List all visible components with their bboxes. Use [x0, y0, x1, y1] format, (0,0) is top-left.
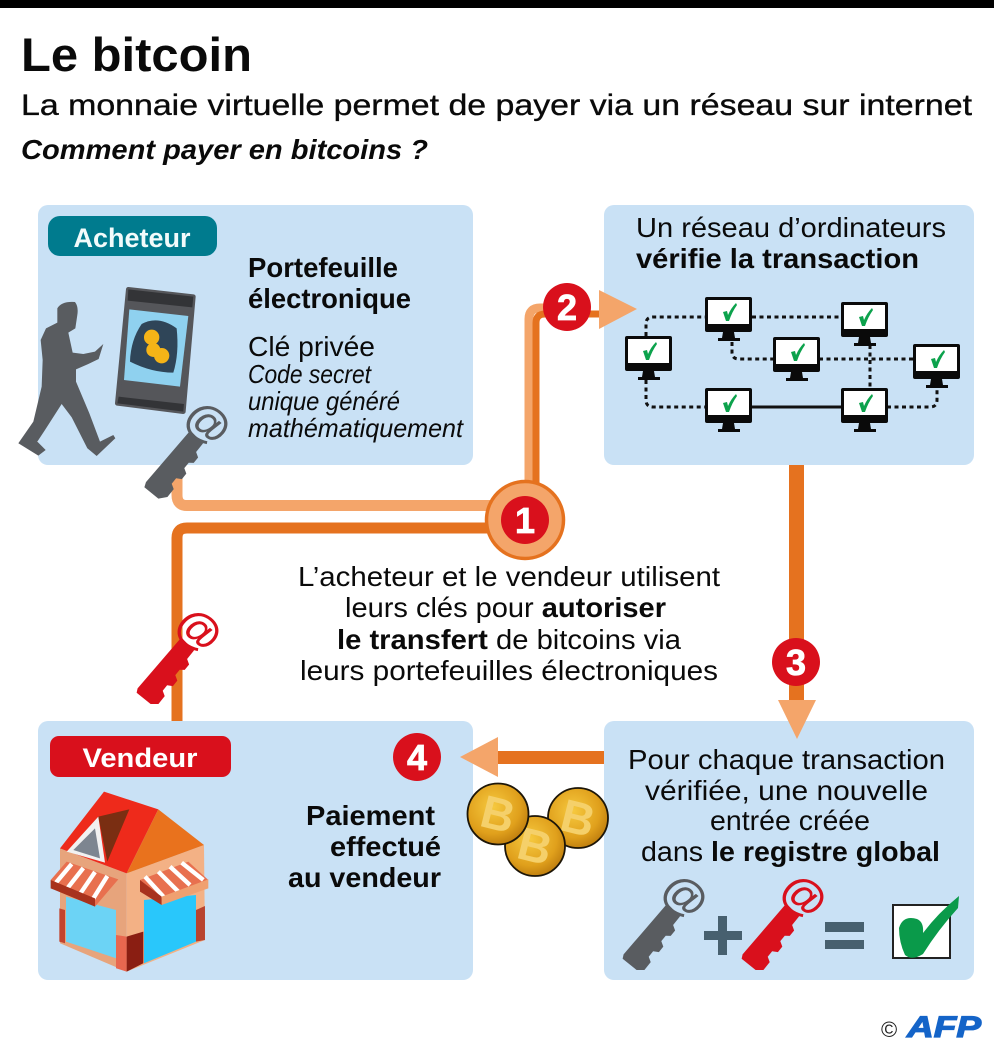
title: Le bitcoin [21, 28, 252, 81]
arrow: to seller [460, 737, 498, 777]
connector: ledger to seller [497, 751, 604, 764]
icon: seller private key: @ [167, 597, 231, 662]
text: payment made: Paiement [306, 800, 435, 831]
text: step 1 explanation: leurs portefeuilles électroniques [300, 655, 718, 686]
icon: gray key in equation [613, 863, 717, 978]
panel: network background [604, 205, 974, 465]
arrow: to ledger [778, 700, 816, 739]
step badge 4 [393, 733, 441, 781]
icon: equals sign [825, 922, 864, 949]
text: network heading: Un réseau d’ordinateurs [636, 212, 946, 243]
text: wallet: Code secret [248, 359, 373, 389]
text: wallet: Clé privée [248, 331, 375, 362]
connector: seller to step 1 [177, 528, 495, 721]
connector: buyer key to step 1 [177, 470, 495, 506]
arrow: to network [599, 290, 637, 329]
step badge 1: 1 [515, 500, 535, 541]
label: Acheteur [48, 216, 217, 256]
label: Acheteur: Acheteur [74, 223, 191, 253]
icon: checked box [893, 896, 959, 958]
credit: AFP: © [881, 1017, 897, 1042]
icon: bitcoin coins: B [513, 817, 557, 875]
subtitle: La monnaie virtuelle permet de payer via un réseau sur internet [21, 89, 973, 122]
icon: buyer private key [135, 390, 240, 506]
step badge 2 [543, 283, 591, 331]
credit: AFP: AFP [906, 1011, 982, 1044]
icon: seller private key [127, 597, 231, 712]
connector: network to ledger [789, 465, 804, 701]
step badge 2: 2 [557, 287, 577, 328]
text: wallet: Portefeuille [248, 252, 398, 283]
icon: bitcoin coins: B [476, 785, 520, 843]
icon: red key in equation [732, 863, 836, 978]
credit: AFP [881, 1011, 982, 1044]
question heading: Comment payer en bitcoins ? [21, 134, 428, 165]
chart: computer network links [646, 317, 937, 407]
panel: seller background [38, 721, 473, 980]
text: step 1 explanation: le transfert de bitcoins via [337, 624, 681, 655]
text: payment made: effectué [330, 831, 441, 862]
text: wallet: électronique [248, 283, 411, 314]
text: step 1 explanation [298, 561, 720, 686]
text: network heading [636, 212, 946, 274]
text: network heading: vérifie la transaction [636, 243, 919, 274]
icon: computer 2 [705, 297, 752, 341]
text: step 1 explanation: L’acheteur et le vendeur utilisent [298, 561, 720, 592]
icon: red key in equation: @ [772, 863, 836, 928]
step badge 1 [486, 482, 564, 558]
text: payment made [288, 800, 441, 893]
text: ledger description: Pour chaque transaction [628, 744, 945, 775]
icon: smartphone wallet [117, 289, 193, 412]
icon: buyer private key: @ [176, 390, 240, 455]
icon: bitcoin coins [468, 784, 608, 876]
icon: computer 5 [913, 344, 960, 388]
step badge 4: 4 [407, 737, 427, 778]
icon: shop [51, 792, 208, 972]
panel: buyer background [38, 205, 473, 465]
text: payment made: au vendeur [288, 862, 441, 893]
icon: computer 7 [841, 388, 888, 432]
panel: ledger background [604, 721, 974, 980]
icon: computer 4 [773, 337, 820, 381]
text: ledger description: dans le registre global [641, 836, 940, 867]
label: Vendeur: Vendeur [82, 743, 198, 773]
icon: computer 3 [841, 302, 888, 346]
icon: computer 6 [705, 388, 752, 432]
icon: bitcoin coins: B [556, 789, 600, 847]
text: wallet: unique généré [248, 386, 400, 416]
text: ledger description [628, 744, 945, 867]
text: step 1 explanation: leurs clés pour autoriser [345, 592, 666, 623]
step badge 3: 3 [786, 642, 806, 683]
text: wallet: mathématiquement [248, 413, 465, 443]
text: ledger description: vérifiée, une nouvelle [645, 775, 928, 806]
text: wallet [248, 252, 465, 443]
connector: step 1 to step 2 [529, 308, 600, 490]
icon: gray key in equation: @ [653, 863, 717, 928]
icon: computer 1 [625, 336, 672, 380]
icon: plus sign [704, 916, 742, 955]
text: ledger description: entrée créée [710, 805, 870, 836]
step badge 3 [772, 638, 820, 686]
icon: person with phone [18, 302, 115, 456]
label: Vendeur [50, 736, 231, 777]
